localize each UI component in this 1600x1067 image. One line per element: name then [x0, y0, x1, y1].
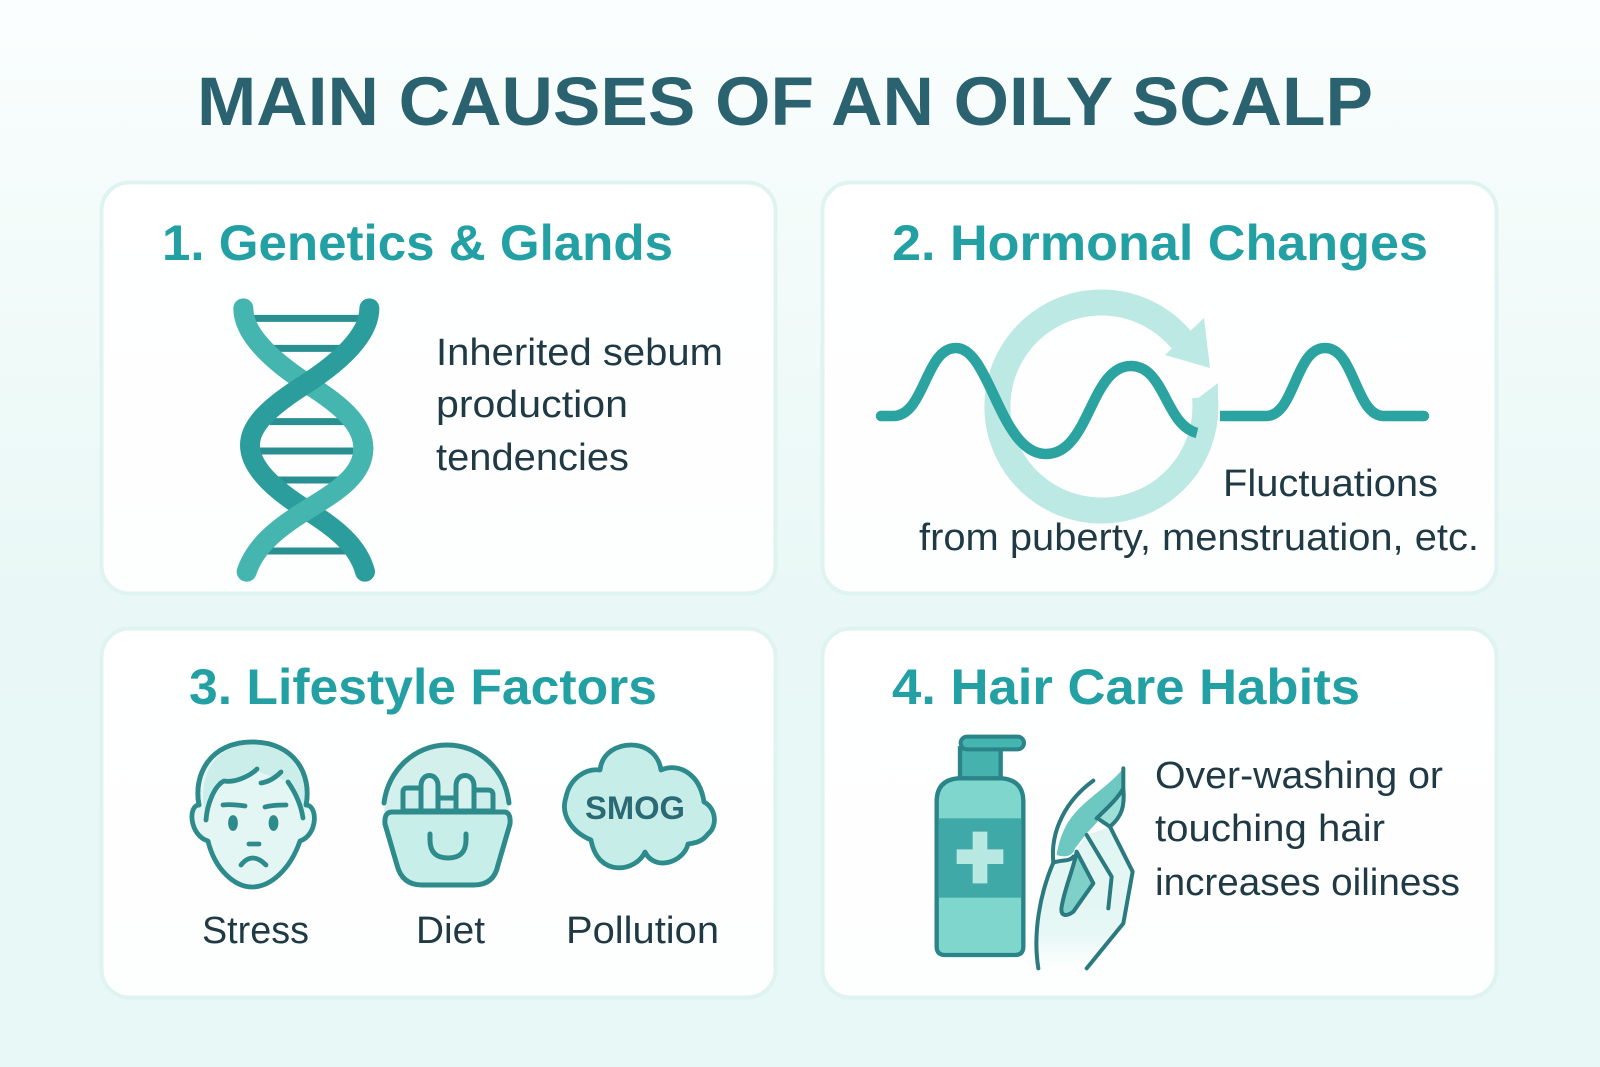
title: MAIN CAUSES OF AN OILY SCALP [197, 63, 1373, 140]
label: pollution: Pollution [566, 910, 719, 952]
heading: hormonal changes: 2. Hormonal Changes [892, 215, 1428, 271]
icon: shampoo bottle [937, 737, 1024, 955]
label: diet: Diet [416, 910, 485, 952]
heading: lifestyle factors: 3. Lifestyle Factors [189, 659, 657, 715]
panel: hair care habits [822, 628, 1496, 998]
icon: circular arrow [997, 303, 1218, 511]
icon: DNA double helix [243, 308, 369, 572]
text: hair care description: increases oiliness [1155, 862, 1460, 904]
icon: smog cloud: SMOG [585, 790, 685, 826]
panel: genetics and glands [102, 182, 776, 594]
icon: hand touching hair [1036, 768, 1133, 968]
heading: genetics and glands: 1. Genetics & Glands [162, 215, 673, 271]
text: genetics description [436, 332, 723, 479]
text: genetics description: tendencies [436, 437, 629, 479]
text: hormonal description: Fluctuations [1223, 463, 1438, 505]
icon: food basket [384, 745, 510, 885]
icon: smog cloud [564, 745, 714, 868]
text: hair care description: Over-washing or [1155, 755, 1443, 797]
text: hair care description [1155, 755, 1460, 904]
label: stress: Stress [202, 910, 309, 952]
text: genetics description: production [436, 384, 628, 426]
text: hormonal description: from puberty, menstruation, etc. [919, 517, 1479, 559]
panel: hormonal changes [822, 182, 1496, 594]
icon: hormone wave line [876, 348, 1429, 454]
text: hair care description: touching hair [1155, 808, 1385, 850]
icon: stressed face [192, 742, 314, 887]
panel: lifestyle factors [102, 628, 776, 998]
text: hormonal description [919, 463, 1479, 559]
heading: hair care habits: 4. Hair Care Habits [892, 659, 1360, 715]
text: genetics description: Inherited sebum [436, 332, 723, 374]
